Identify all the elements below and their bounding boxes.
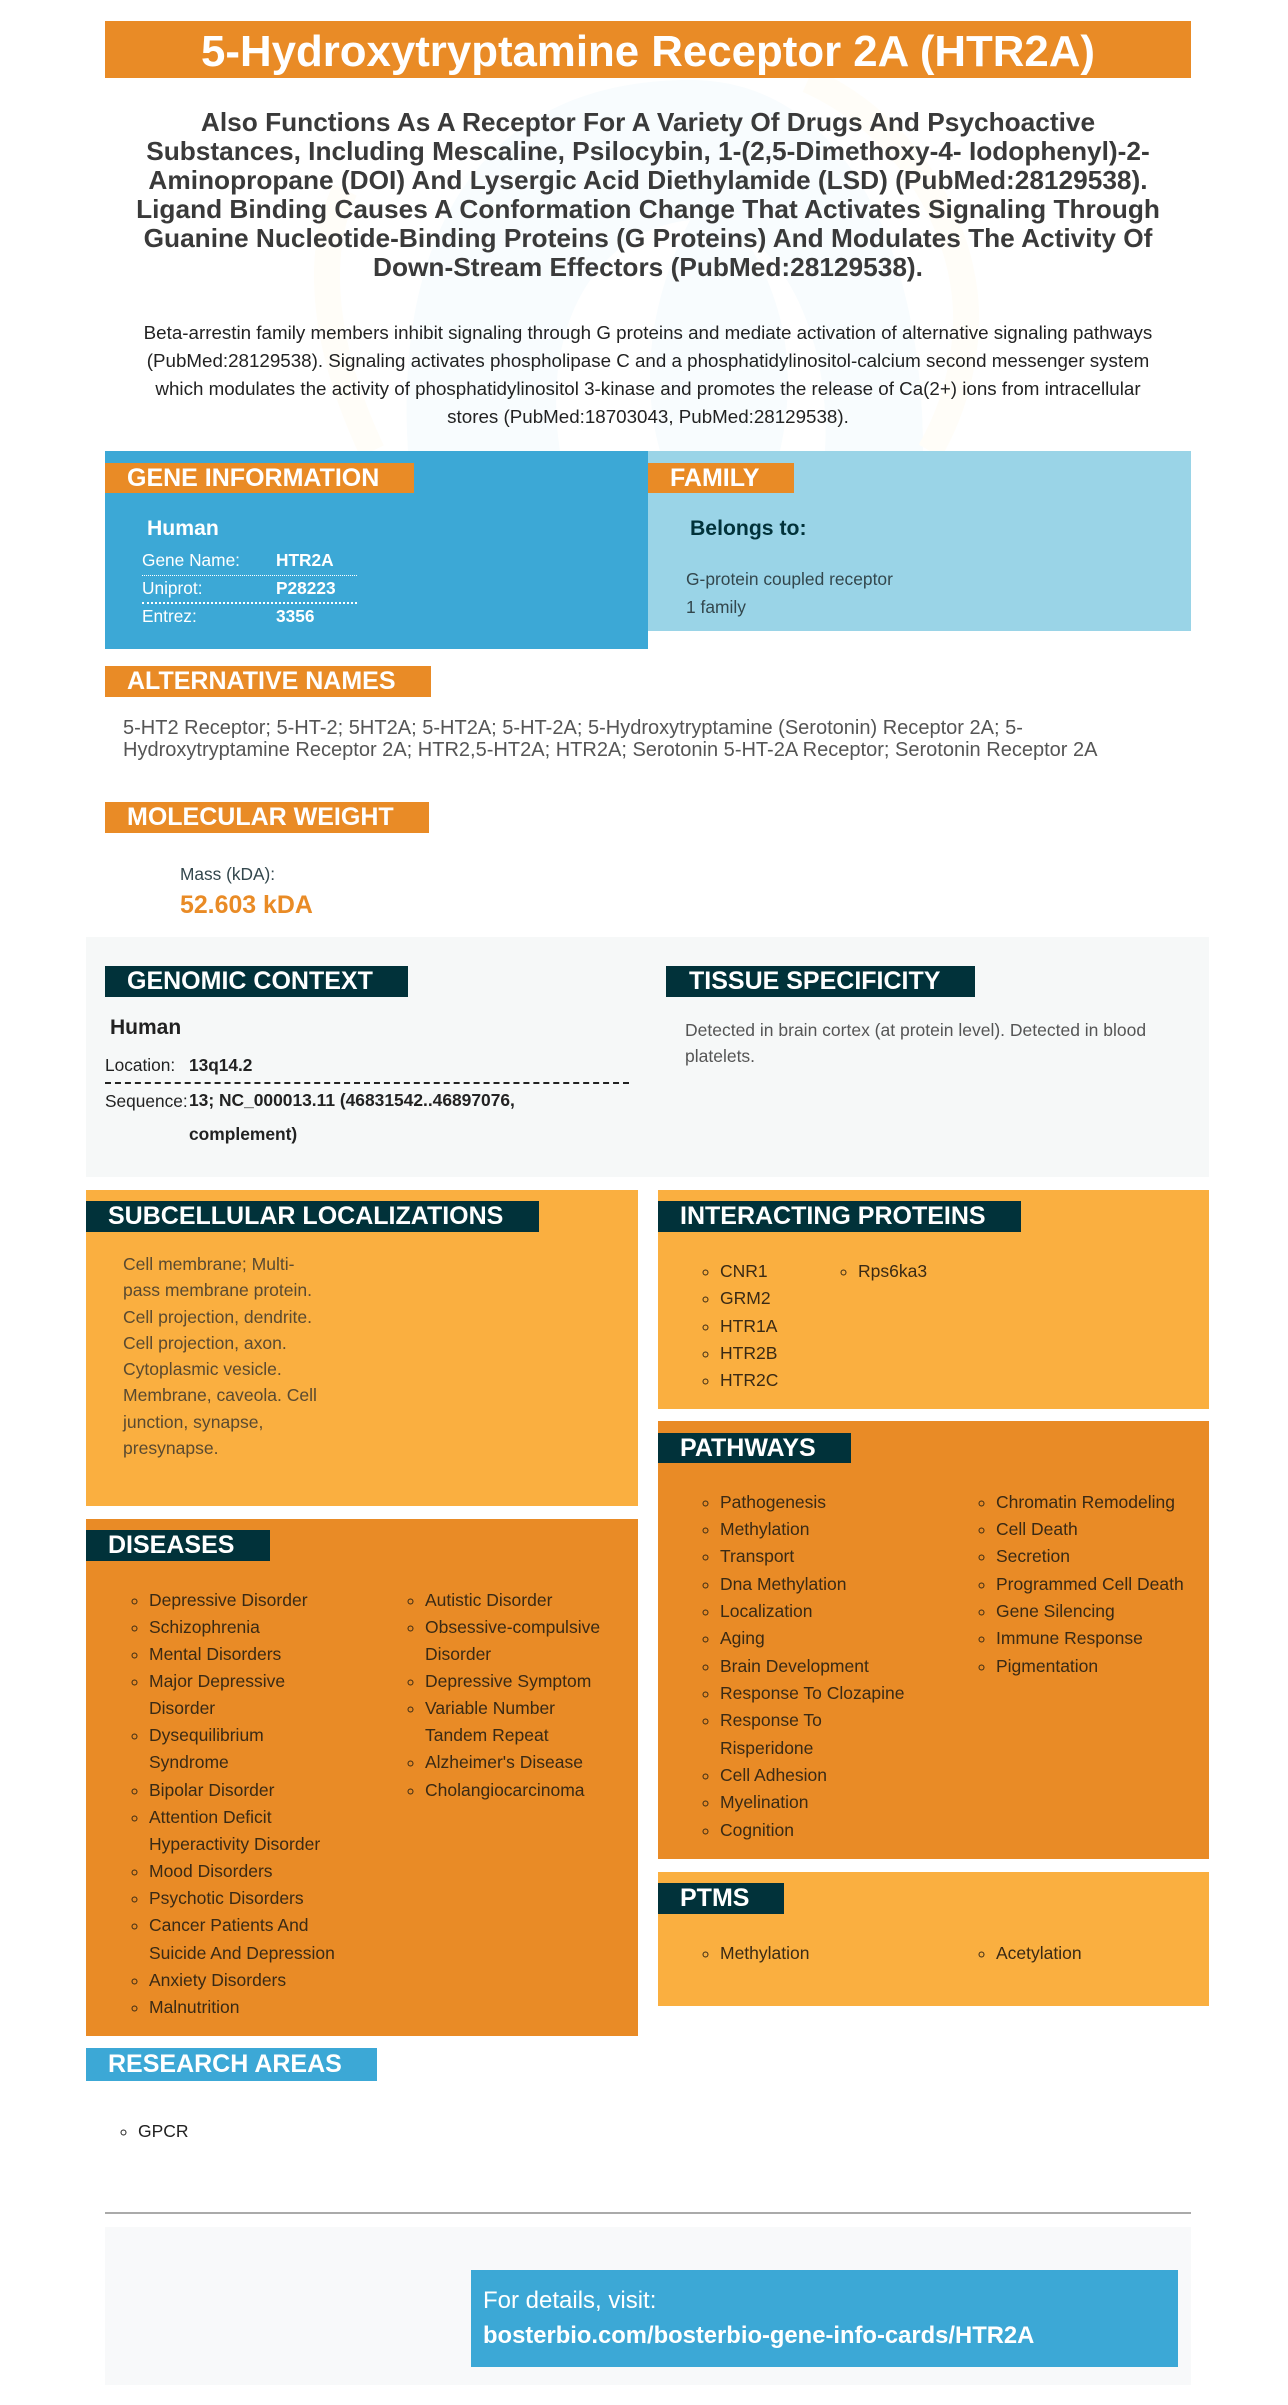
panel: footer — [105, 2227, 1191, 2385]
description paragraph: which modulates the activity of phosphatidylinositol 3-kinase and promotes the release of Ca(2+) ions from intracellular — [155, 378, 1141, 399]
family text: G-protein coupled receptor — [686, 569, 893, 589]
diseases list column 2: Tandem Repeat — [425, 1725, 549, 1745]
panel: family — [648, 451, 1191, 631]
diseases list column 1 — [132, 1590, 335, 2017]
location row: 13q14.2 — [189, 1055, 252, 1075]
diseases list column 1: Malnutrition — [149, 1997, 239, 2017]
diseases list column 1: Anxiety Disorders — [149, 1970, 286, 1990]
heading: molecular weight: MOLECULAR WEIGHT — [127, 803, 394, 831]
pathways list column 1: Response To Clozapine — [720, 1683, 905, 1703]
subcellular text: Cell projection, dendrite. — [123, 1307, 312, 1327]
interacting proteins list column 1: GRM2 — [720, 1288, 771, 1308]
genomic species: Human — [110, 1016, 181, 1039]
research areas list: GPCR — [138, 2121, 189, 2141]
panel: ptms — [658, 1872, 1209, 2006]
sequence row: Sequence: — [105, 1091, 188, 1111]
heading: family: FAMILY — [670, 464, 759, 492]
alternative names text: 5-HT2 Receptor; 5-HT-2; 5HT2A; 5-HT2A; 5-HT-2A; 5-Hydroxytryptamine (Serotonin) Receptor 2A; 5- — [123, 717, 1023, 739]
background watermark logo — [0, 0, 1288, 460]
panel: genomic context and tissue specificity — [86, 937, 1209, 1177]
uniprot row: Uniprot: — [142, 578, 203, 598]
subtitle: Down-Stream Effectors (PubMed:28129538). — [373, 252, 923, 282]
gene name row — [142, 550, 357, 576]
uniprot row — [142, 577, 357, 604]
heading: research areas: RESEARCH AREAS — [108, 2050, 342, 2078]
heading: gene information: GENE INFORMATION — [127, 464, 379, 492]
heading: pathways: PATHWAYS — [680, 1434, 816, 1462]
mass label: Mass (kDA): — [180, 864, 275, 884]
belongs to label: Belongs to: — [690, 517, 807, 540]
heading: alternative names: ALTERNATIVE NAMES — [127, 667, 396, 695]
pathways list column 1: Myelination — [720, 1792, 809, 1812]
family text — [686, 569, 893, 617]
pathways list column 1: Response To — [720, 1710, 822, 1730]
subtitle: Also Functions As A Receptor For A Variety Of Drugs And Psychoactive — [201, 107, 1095, 137]
family text: 1 family — [686, 597, 746, 617]
interacting proteins list column 1: HTR1A — [720, 1316, 777, 1336]
diseases list column 1: Mental Disorders — [149, 1644, 281, 1664]
footer divider — [105, 2212, 1191, 2214]
callout label: For details, visit: — [483, 2287, 656, 2314]
mass value: 52.603 kDA — [180, 891, 313, 919]
subcellular text — [122, 1254, 317, 1458]
diseases list column 1: Schizophrenia — [149, 1617, 260, 1637]
diseases list column 1: Hyperactivity Disorder — [149, 1834, 320, 1854]
sequence row — [105, 1090, 515, 1144]
ptms list column 2: Acetylation — [996, 1942, 1082, 1962]
heading: family — [648, 463, 794, 493]
panel: diseases — [86, 1519, 638, 2036]
pathways list column 1 — [702, 1492, 905, 1840]
diseases list column 1: Attention Deficit — [149, 1807, 272, 1827]
pathways list column 1: Risperidone — [720, 1738, 813, 1758]
subtitle: Guanine Nucleotide-Binding Proteins (G Proteins) And Modulates The Activity Of — [144, 223, 1152, 253]
diseases list column 1: Disorder — [149, 1698, 215, 1718]
pathways list column 1: Pathogenesis — [720, 1492, 826, 1512]
diseases list column 1: Depressive Disorder — [149, 1590, 308, 1610]
subcellular text: Membrane, caveola. Cell — [123, 1385, 317, 1405]
diseases list column 1: Psychotic Disorders — [149, 1888, 304, 1908]
heading: research areas — [86, 2048, 377, 2081]
subtitle: Ligand Binding Causes A Conformation Change That Activates Signaling Through — [136, 194, 1160, 224]
pathways list column 2: Immune Response — [996, 1628, 1143, 1648]
pathways list column 1: Cell Adhesion — [720, 1765, 827, 1785]
uniprot row: P28223 — [276, 578, 336, 598]
interacting proteins list column 1 — [702, 1261, 778, 1390]
tissue specificity text: Detected in brain cortex (at protein level). Detected in blood — [685, 1020, 1146, 1040]
interacting proteins list column 1: CNR1 — [720, 1261, 768, 1281]
diseases list column 1: Bipolar Disorder — [149, 1780, 274, 1800]
pathways list column 1: Cognition — [720, 1820, 794, 1840]
title: 5-Hydroxytryptamine Receptor 2A (HTR2A) — [201, 27, 1095, 76]
diseases list column 2: Depressive Symptom — [425, 1671, 591, 1691]
heading: subcellular localizations: SUBCELLULAR LOCALIZATIONS — [108, 1202, 503, 1230]
pathways list column 2: Secretion — [996, 1546, 1070, 1566]
diseases list column 2: Alzheimer's Disease — [425, 1752, 583, 1772]
diseases list column 2: Obsessive-compulsive — [425, 1617, 600, 1637]
pathways list column 1: Localization — [720, 1601, 812, 1621]
interacting proteins list column 1: HTR2B — [720, 1343, 777, 1363]
diseases list column 1: Major Depressive — [149, 1671, 285, 1691]
interacting proteins list column 2: Rps6ka3 — [858, 1261, 927, 1281]
subcellular text: Cell membrane; Multi- — [123, 1254, 294, 1274]
entrez row — [142, 606, 314, 626]
pathways list column 2 — [978, 1492, 1184, 1676]
panel: gene information — [105, 451, 648, 649]
description paragraph: Beta-arrestin family members inhibit signaling through G proteins and mediate activation of alternative signaling pathways — [144, 322, 1152, 343]
subcellular text: Cell projection, axon. — [123, 1333, 287, 1353]
panel: pathways — [658, 1421, 1209, 1859]
heading: interacting proteins: INTERACTING PROTEINS — [680, 1202, 986, 1230]
diseases list column 1: Cancer Patients And — [149, 1915, 309, 1935]
heading: tissue specificity: TISSUE SPECIFICITY — [689, 967, 940, 995]
gene name row: HTR2A — [276, 550, 334, 570]
tissue specificity text: platelets. — [685, 1046, 755, 1066]
diseases list column 2: Variable Number — [425, 1698, 555, 1718]
heading: diseases: DISEASES — [108, 1531, 234, 1559]
pathways list column 2: Pigmentation — [996, 1656, 1098, 1676]
pathways list column 2: Chromatin Remodeling — [996, 1492, 1175, 1512]
callout url: bosterbio.com/bosterbio-gene-info-cards/HTR2A — [483, 2322, 1034, 2349]
diseases list column 2 — [408, 1590, 600, 1800]
entrez row: 3356 — [276, 606, 314, 626]
pathways list column 2: Programmed Cell Death — [996, 1574, 1184, 1594]
subcellular text: pass membrane protein. — [123, 1280, 312, 1300]
sequence row: 13; NC_000013.11 (46831542..46897076, — [189, 1090, 515, 1110]
tissue specificity text — [685, 1020, 1146, 1066]
pathways list column 2: Gene Silencing — [996, 1601, 1115, 1621]
heading: ptms — [658, 1883, 784, 1914]
gene name row: Gene Name: — [142, 550, 240, 570]
location row: Location: — [105, 1055, 175, 1075]
diseases list column 2: Disorder — [425, 1644, 491, 1664]
subcellular text: Cytoplasmic vesicle. — [123, 1359, 282, 1379]
pathways list column 1: Aging — [720, 1628, 765, 1648]
subtitle: Aminopropane (DOI) And Lysergic Acid Diethylamide (LSD) (PubMed:28129538). — [148, 165, 1148, 195]
callout: details link — [471, 2270, 1178, 2367]
alternative names text — [123, 717, 1098, 761]
diseases list column 1: Suicide And Depression — [149, 1943, 335, 1963]
pathways list column 1: Brain Development — [720, 1656, 869, 1676]
entrez row: Entrez: — [142, 606, 197, 626]
pathways list column 1: Dna Methylation — [720, 1574, 846, 1594]
pathways list column 2: Cell Death — [996, 1519, 1078, 1539]
sequence row: complement) — [189, 1124, 297, 1144]
alternative names text: Hydroxytryptamine Receptor 2A; HTR2,5-HT2A; HTR2A; Serotonin 5-HT-2A Receptor; Serotonin Receptor 2A — [123, 739, 1098, 761]
description paragraph: (PubMed:28129538). Signaling activates phospholipase C and a phosphatidylinositol-calcium second messenger system — [147, 350, 1149, 371]
diseases list column 2: Autistic Disorder — [425, 1590, 552, 1610]
heading: diseases — [86, 1530, 270, 1561]
subtitle — [136, 107, 1160, 282]
interacting proteins list column 1: HTR2C — [720, 1370, 778, 1390]
location row — [105, 1054, 629, 1084]
description paragraph — [144, 322, 1152, 427]
description paragraph: stores (PubMed:18703043, PubMed:28129538). — [447, 406, 849, 427]
diseases list column 1: Mood Disorders — [149, 1861, 273, 1881]
subtitle: Substances, Including Mescaline, Psilocybin, 1-(2,5-Dimethoxy-4- Iodophenyl)-2- — [146, 136, 1150, 166]
heading: genomic context: GENOMIC CONTEXT — [127, 967, 373, 995]
pathways list column 1: Methylation — [720, 1519, 810, 1539]
panel: subcellular localizations — [86, 1190, 638, 1506]
heading: pathways — [658, 1433, 851, 1463]
panel: interacting proteins — [658, 1190, 1209, 1409]
diseases list column 1: Dysequilibrium — [149, 1725, 264, 1745]
diseases list column 2: Cholangiocarcinoma — [425, 1780, 585, 1800]
ptms list column 1: Methylation — [720, 1942, 810, 1962]
species label: Human — [147, 517, 219, 540]
pathways list column 1: Transport — [720, 1546, 794, 1566]
subcellular text: junction, synapse, — [123, 1412, 263, 1432]
diseases list column 1: Syndrome — [149, 1752, 229, 1772]
heading: ptms: PTMS — [680, 1884, 749, 1912]
subcellular text: presynapse. — [123, 1438, 219, 1458]
